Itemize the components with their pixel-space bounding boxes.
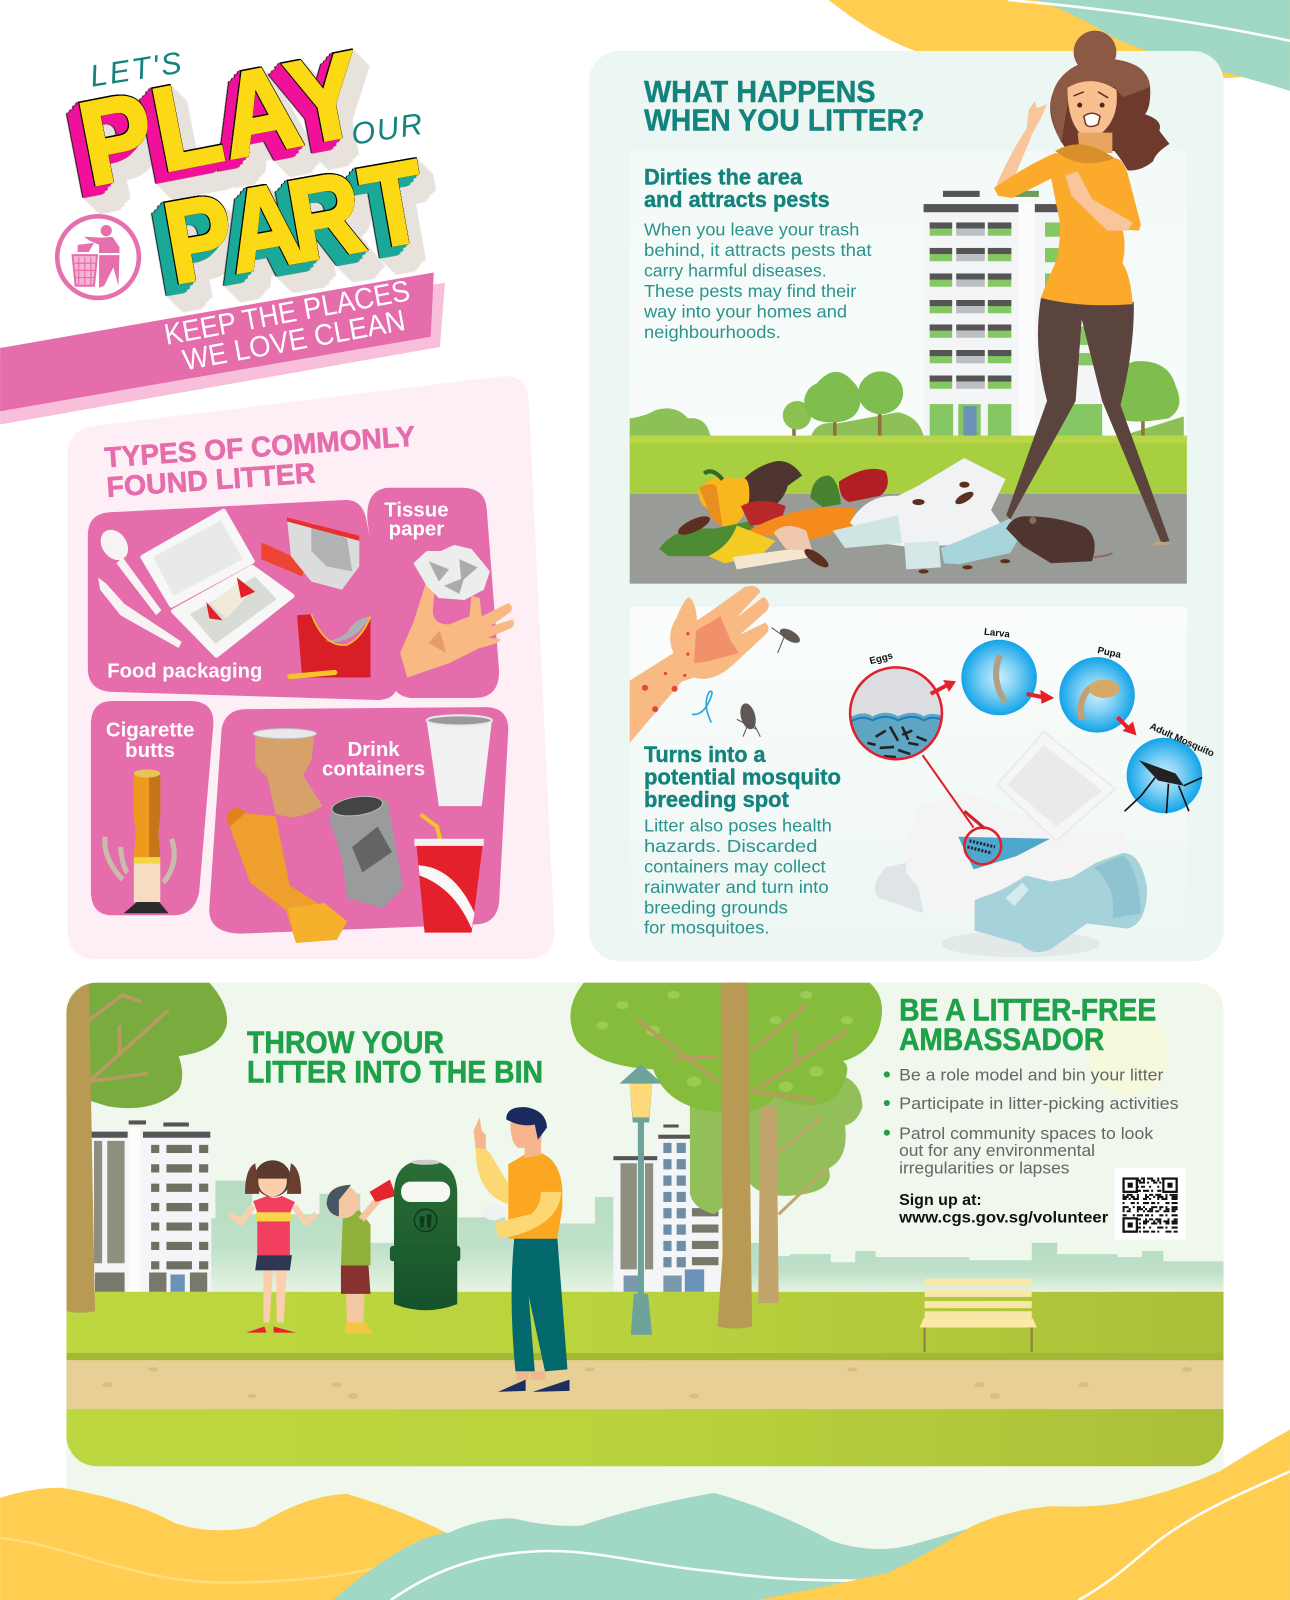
green litter bin [390,1160,460,1310]
label: tissue paper [384,499,449,541]
ribbon: keep the places [0,272,445,424]
plastic bottle [975,853,1147,952]
body text: hazards: for mosquitoes. [644,918,769,938]
heading: types of litter: FOUND LITTER [106,457,317,504]
wordmark: our: OUR [349,107,425,152]
body text: pests: carry harmful diseases. [644,261,827,281]
sign-up text: Sign up at: [899,1192,982,1209]
top-right waves [829,0,1290,91]
heading: throw your litter: THROW YOUR [247,1024,444,1060]
panel: throw your litter [61,983,1224,1600]
ribbon text: KEEP THE PLACES [162,274,413,352]
spoon and fork [95,525,182,648]
label: cigarette butts: butts [125,740,175,762]
man pointing up [474,1107,569,1392]
wordmark: play: PLAY [69,26,373,210]
left tree [61,983,227,1313]
wordmark: part: PART [156,136,435,308]
subheading: dirties: and attracts pests [644,187,830,212]
stage: adult mosquito [1125,721,1216,813]
body text: hazards: Litter also poses health [644,816,832,836]
card: mosquito breeding [630,586,1216,961]
label: tissue paper: Tissue [384,499,449,521]
subheading: mosquito breeding [644,742,841,812]
panel: what happens when you litter [589,31,1224,961]
fries carton [290,614,371,678]
heading: throw your litter: LITTER INTO THE BIN [247,1054,543,1090]
ambassador bullet list [884,1066,1179,1177]
ambassador bullet list: irregularities or lapses [899,1158,1069,1177]
arrows [931,681,1136,735]
label: cigarette butts [106,720,194,762]
crushed coffee cup [253,729,323,817]
subheading: dirties [644,165,830,212]
body text: pests: way into your homes and [643,301,847,321]
body text: pests: neighbourhoods. [644,322,781,342]
tile: cigarette butts [91,701,213,915]
label: drink containers: containers [322,759,425,781]
heading: throw your litter [247,1024,543,1090]
crushed can [330,793,403,908]
stage: eggs: Eggs [868,650,894,667]
background bushes and trees [630,361,1184,454]
ambassador bullet list: Be a role model and bin your litter [899,1066,1164,1085]
apartments left [91,1120,210,1292]
apartments right [613,1124,719,1292]
main park tree [570,983,882,1329]
sign-up text [898,1192,1108,1226]
heading: types of litter: TYPES OF COMMONLY [103,421,416,474]
rear park tree [690,1071,862,1303]
ambassador bullet list: Participate in litter-picking activities [899,1094,1179,1113]
title badge: let's play our part [0,26,445,424]
bench [919,1279,1037,1352]
soda cup with straw [414,814,484,933]
tile: food packaging [88,500,398,700]
park scene [61,983,1224,1466]
subheading: mosquito breeding: Turns into a [644,742,766,767]
body text: pests: These pests may find their [644,281,856,301]
heading: what happens: WHAT HAPPENS [644,75,876,109]
foam food box with apple core [143,511,292,655]
subheading: dirties: Dirties the area [644,165,803,190]
foam box with water [875,732,1131,957]
label: food packaging: Food packaging [107,661,262,683]
stage: larva: Larva [983,627,1011,640]
label: cigarette butts: Cigarette [106,720,194,742]
subheading: mosquito breeding: breeding spot [644,787,789,812]
hand with tissue [400,545,514,678]
stage: larva [961,627,1037,715]
body text: hazards: containers may collect [644,856,826,876]
body text: hazards: breeding grounds [644,897,788,917]
crushed carton [261,517,359,590]
heading: ambassador: AMBASSADOR [899,1021,1104,1057]
icon: tidy man [57,216,139,298]
heading: ambassador [899,991,1156,1057]
body text: pests: When you leave your trash [644,220,859,240]
stage: pupa: Pupa [1096,645,1122,661]
body text: hazards: hazards. Discarded [644,836,817,856]
woman looking worried [994,31,1174,546]
arm with bites [630,586,769,743]
body text: hazards: rainwater and turn into [644,877,829,897]
ambassador bullet list: out for any environmental [899,1141,1095,1160]
tile: tissue paper [367,488,514,698]
crushed orange bottle [227,808,347,943]
tile: drink containers [209,707,508,943]
flying mosquitoes [692,626,802,737]
grass, path and lower lawn [66,1292,1224,1466]
cigarette butt [105,769,174,913]
heading: what happens [644,75,925,138]
label: drink containers: Drink [348,739,400,761]
ribbon text [162,274,413,377]
pointer line [923,755,974,828]
litter pile with pests [659,459,1112,573]
wordmark: let's: LET'S [88,46,184,94]
lamp post [619,1064,662,1335]
boy drinking [327,1180,396,1334]
girl with thumbs up [231,1160,316,1333]
heading: what happens: WHEN YOU LITTER? [644,104,925,138]
apartment block [924,191,1102,436]
sign-up text: www.cgs.gov.sg/volunteer [898,1209,1108,1226]
label: tissue paper: paper [389,519,444,541]
stage: pupa [1059,645,1135,733]
stage: adult mosquito: Adult Mosquito [1148,721,1216,760]
card: dirties the area [630,31,1187,584]
subheading: mosquito breeding: potential mosquito [644,765,841,790]
bottom waves [0,1430,1290,1600]
panel: types of commonly found litter [67,376,554,959]
label: drink containers [322,739,425,781]
body text: pests [643,220,872,342]
qr code [1114,1168,1186,1240]
grass and road [630,436,1187,584]
heading: ambassador: BE A LITTER-FREE [899,991,1156,1027]
ambassador bullet list: Patrol community spaces to look [899,1124,1154,1143]
body text: pests: behind, it attracts pests that [644,240,872,260]
stage: eggs [848,654,944,760]
plastic cup [427,715,492,806]
heading: types of litter [103,421,416,504]
ribbon text: WE LOVE CLEAN [180,304,408,377]
skyline [211,1181,1224,1292]
mosquito life cycle [847,627,1216,828]
body text: hazards [644,816,832,938]
